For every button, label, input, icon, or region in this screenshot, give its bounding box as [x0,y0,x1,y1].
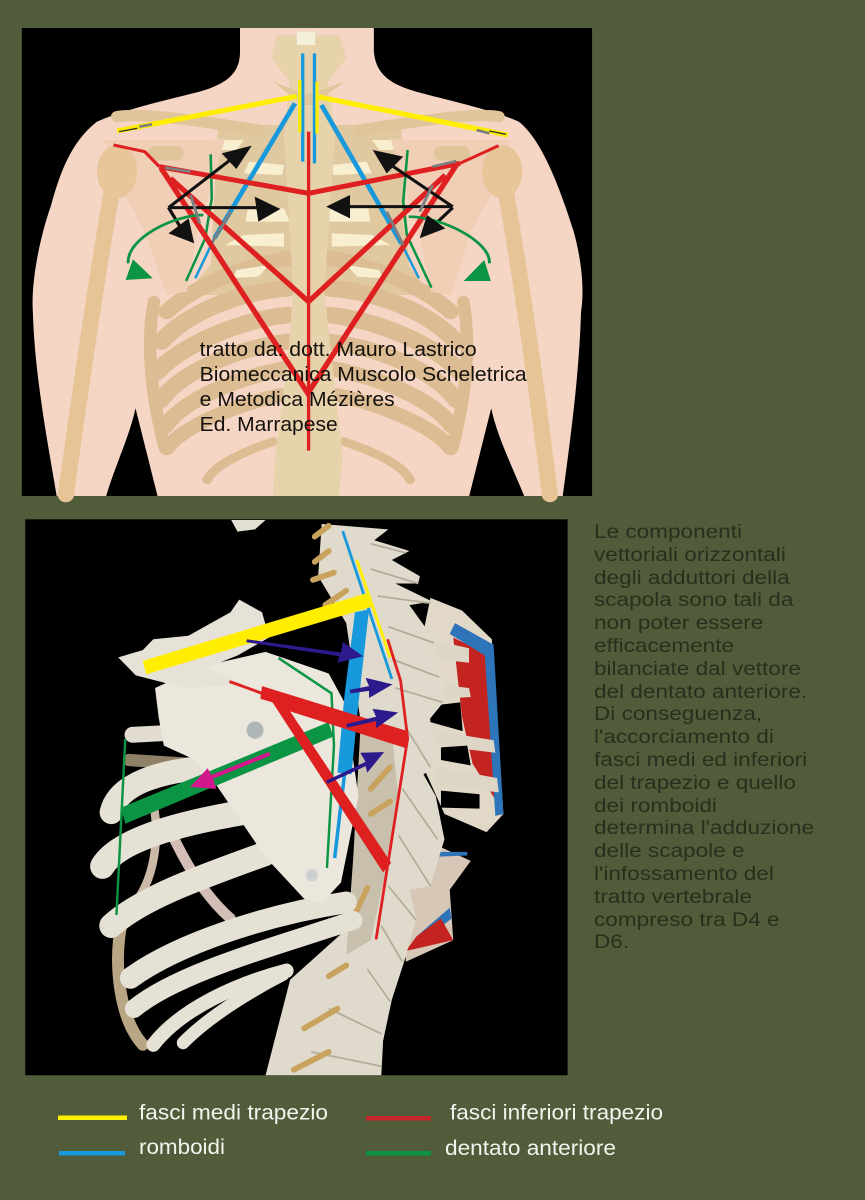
panel: posterior view of torso with muscle vectors [22,28,592,496]
ribs [102,767,353,1045]
intervertebral discs [294,526,390,1070]
vector: fasci medi trapezio [143,531,392,679]
legend item: romboidi [59,1135,225,1159]
description text: Le componenti [594,521,742,543]
black force arrows, right [346,163,453,227]
pale rib gaps [207,140,409,278]
top rib fragment [231,520,266,532]
legend item: fasci medi trapezio [58,1100,328,1124]
arrow heads [169,146,445,243]
vector: romboidi [335,609,369,858]
vector: dentato anteriore [116,658,334,915]
source credit text: Ed. Marrapese [200,413,338,436]
source credit text [200,338,527,436]
vector: fasci inferiori trapezio [229,639,408,939]
upper thorax [185,125,431,295]
panel: skeleton side view with muscle vectors [25,519,568,1075]
description text: determina l'adduzione [594,817,814,839]
body silhouette [33,28,582,496]
description text: non poter essere [594,612,763,634]
description text: scapola sono tali da [594,589,794,611]
description text: delle scapole e [594,840,745,862]
description text [594,521,814,953]
vertebral bodies [346,731,399,955]
spine [271,35,346,496]
shoulder heads [97,145,137,198]
navy force arrows [246,639,398,784]
source credit text: Biomeccanica Muscolo Scheletrica [200,363,527,386]
source credit text: tratto da: dott. Mauro Lastrico [200,338,477,361]
legend [58,1100,663,1160]
bolts [247,721,263,739]
vector: dentato anteriore [186,150,431,288]
acromion and scapular spine [118,600,269,688]
vector: fasci inferiori trapezio [114,132,499,451]
description text: l'infossamento del [594,863,774,885]
legend item: dentato anteriore: dentato anteriore [445,1136,616,1160]
clavicles and acromion [117,116,499,153]
description text: dei romboidi [594,795,717,817]
painted rib cage, far side [416,598,503,832]
humerus bones [66,182,550,495]
muscle vectors [114,53,508,451]
description text: compreso tra D4 e [594,909,780,931]
source credit text: e Metodica Mézières [200,388,395,411]
painted rib cage, lower [401,839,471,962]
legend item: fasci medi trapezio: fasci medi trapezio [139,1100,328,1124]
green rotation curves [128,215,489,263]
vector: fasci medi trapezio [117,80,508,135]
description text: vettoriali orizzontali [594,544,786,566]
black force arrows, left [169,157,258,232]
description text: l'accorciamento di [594,726,774,748]
legend item: dentato anteriore [366,1136,616,1160]
magenta dentato arrow [190,752,270,789]
legend item: fasci inferiori trapezio: fasci inferiori trapezio [450,1100,663,1124]
description text: efficacemente [594,635,734,657]
gray small vector arrows [139,124,489,245]
scapula [155,652,359,903]
scapulae [104,138,225,295]
description text: fasci medi ed inferiori [594,749,807,771]
description text: bilanciate dal vettore [594,658,801,680]
legend item: fasci inferiori trapezio [366,1100,663,1124]
spine with spinous processes [266,524,446,1075]
far ribs and cartilage [118,733,230,1045]
description text: Di conseguenza, [594,703,762,725]
vertebra shading [311,544,443,1066]
description text: degli adduttori della [594,567,790,589]
description text: tratto vertebrale [594,886,752,908]
description text: del dentato anteriore. [594,681,807,703]
description text: D6. [594,931,629,953]
vector: romboidi [195,53,419,278]
description text: del trapezio e quello [594,772,796,794]
lower ribs [150,258,288,480]
legend item: romboidi: romboidi [139,1135,225,1159]
